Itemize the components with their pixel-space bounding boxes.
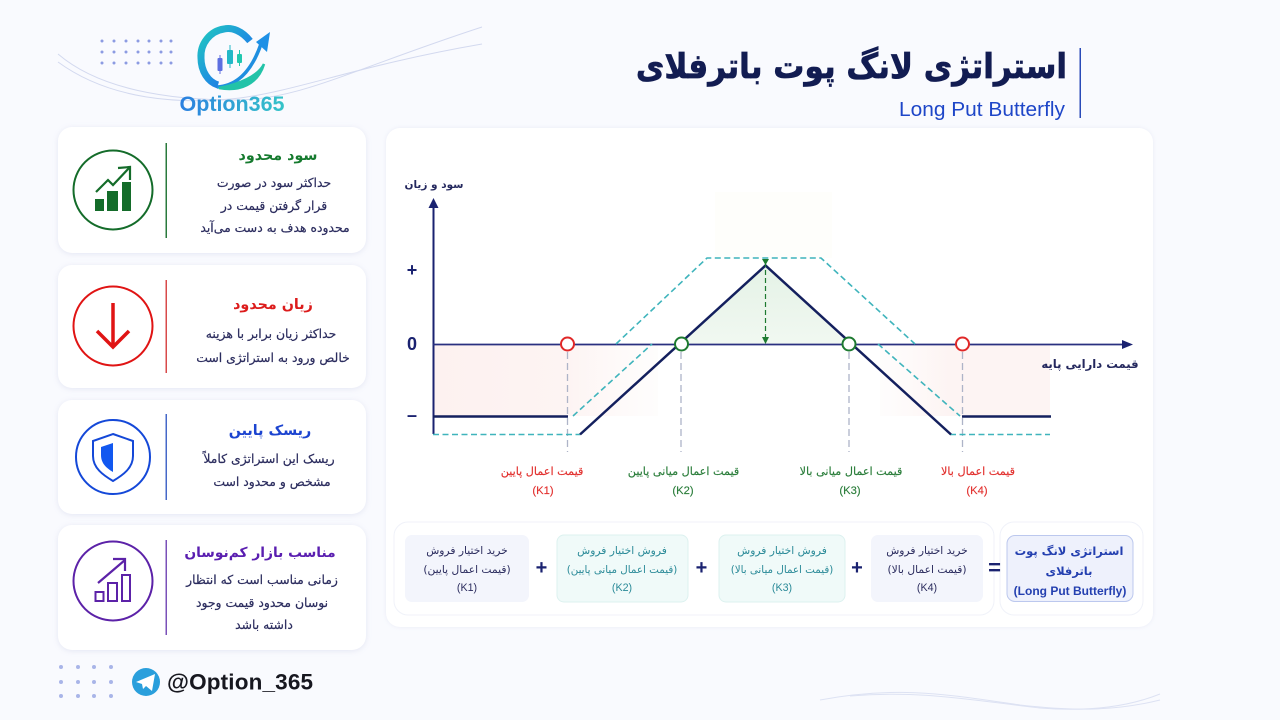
- payoff chart: [404, 179, 1139, 452]
- description: خالص ورود به استراتژی است: [196, 350, 350, 366]
- description: قرار گرفتن قیمت در: [220, 198, 327, 214]
- label K3: قیمت اعمال میانی بالا: [800, 465, 902, 478]
- box: buy put K4: [871, 535, 983, 602]
- decorative dots bottom: [59, 665, 113, 698]
- title: استراتژی لانگ پوت باترفلای: [636, 46, 1067, 86]
- heading: سود محدود: [239, 148, 317, 164]
- box: buy put K1: خرید اختیار فروش: [426, 544, 508, 557]
- plus: +: [536, 557, 547, 579]
- description: حداکثر سود در صورت: [217, 175, 331, 191]
- box: result: (Long Put Butterfly): [1014, 584, 1126, 598]
- description: حداکثر زیان برابر با هزینه: [206, 326, 336, 342]
- telegram handle: [132, 668, 313, 696]
- description: مشخص و محدود است: [213, 474, 331, 490]
- y axis ticks: [407, 260, 417, 425]
- box: sell put K3: [719, 535, 845, 602]
- box: sell put K2: فروش اختیار فروش: [577, 544, 667, 557]
- plus: +: [851, 557, 863, 579]
- description: داشته باشد: [235, 617, 293, 632]
- y axis title: سود و زیان: [404, 179, 464, 191]
- payoff line: [433, 266, 1051, 434]
- equals: =: [988, 555, 1001, 580]
- label K2: [628, 465, 739, 497]
- max profit arrow: [762, 259, 769, 344]
- box: sell put K3: (قیمت اعمال میانی بالا): [731, 564, 833, 576]
- box: buy put K1: (K1): [457, 582, 477, 594]
- axes: [428, 198, 1133, 434]
- dashed leg lines: [433, 258, 1050, 434]
- y axis ticks: –: [407, 405, 417, 425]
- panel: payoff diagram: [386, 128, 1153, 627]
- box: sell put K2: [557, 535, 688, 602]
- icon: telegram: [132, 668, 160, 696]
- profit zone: [681, 265, 849, 344]
- icon: shield blue: [76, 420, 150, 494]
- icon: down arrow red: [74, 286, 152, 366]
- card: low risk: [58, 400, 366, 514]
- loss zone left: [433, 344, 658, 416]
- logo: Option365: [180, 28, 285, 116]
- description: [200, 175, 350, 236]
- label K3: (K3): [839, 485, 861, 497]
- box: buy put K4: (K4): [917, 582, 937, 594]
- title rule: [1080, 48, 1081, 118]
- handle text: @Option_365: [167, 670, 313, 694]
- formula row: [394, 522, 1143, 615]
- logo wordmark: Option365: [180, 92, 285, 116]
- x axis title: قیمت دارایی پایه: [1041, 357, 1139, 372]
- description: نوسان محدود قیمت وجود: [196, 595, 328, 611]
- box: sell put K2: (قیمت اعمال میانی پایین): [567, 564, 677, 576]
- label K3: [800, 465, 902, 497]
- description: [185, 572, 338, 632]
- strike markers: [561, 338, 969, 350]
- card: limited loss: [58, 265, 366, 388]
- heading: زیان محدود: [233, 297, 313, 313]
- box: result: استراتژی لانگ پوت: [1015, 544, 1123, 559]
- description: [202, 450, 335, 490]
- label K1: [501, 465, 583, 497]
- box: buy put K4: (قیمت اعمال بالا): [887, 563, 967, 576]
- card: limited profit: [58, 127, 366, 253]
- strike labels: [501, 465, 1015, 497]
- plus: +: [696, 557, 707, 579]
- heading: ریسک پایین: [229, 423, 311, 439]
- label K2: قیمت اعمال میانی پایین: [628, 465, 739, 479]
- icon: growth chart purple: [74, 542, 152, 620]
- description: [196, 326, 350, 366]
- box: buy put K1: (قیمت اعمال پایین): [423, 563, 511, 576]
- label K4: [941, 465, 1015, 497]
- strike guide lines: [568, 352, 962, 452]
- label K4: قیمت اعمال بالا: [941, 465, 1015, 478]
- description: ریسک این استراتژی کاملاً: [202, 450, 335, 467]
- box: sell put K3: (K3): [772, 582, 792, 594]
- icon: growth chart green: [74, 150, 152, 230]
- heading: مناسب بازار کم‌نوسان: [184, 545, 336, 561]
- decorative dots top: [100, 40, 172, 64]
- label K1: قیمت اعمال پایین: [501, 465, 583, 479]
- box: buy put K4: خرید اختیار فروش: [886, 544, 968, 557]
- subtitle: Long Put Butterfly: [899, 98, 1066, 121]
- label K2: (K2): [672, 485, 694, 497]
- box: result: باترفلای: [1046, 564, 1092, 578]
- title block: [636, 46, 1081, 121]
- card: low-volatility market: [58, 525, 366, 650]
- icon: logo ring and arrow: [201, 28, 270, 89]
- box: buy put K1: [405, 535, 529, 602]
- description: محدوده هدف به دست می‌آید: [200, 220, 350, 236]
- description: زمانی مناسب است که انتظار: [185, 572, 338, 588]
- box: sell put K2: (K2): [612, 582, 632, 594]
- label K4: (K4): [966, 485, 988, 497]
- y axis ticks: +: [407, 260, 417, 280]
- box: result: [1007, 536, 1133, 602]
- label K1: (K1): [532, 485, 554, 497]
- box: sell put K3: فروش اختیار فروش: [737, 544, 827, 557]
- y axis ticks: 0: [407, 334, 417, 354]
- loss zone right: [880, 344, 1050, 416]
